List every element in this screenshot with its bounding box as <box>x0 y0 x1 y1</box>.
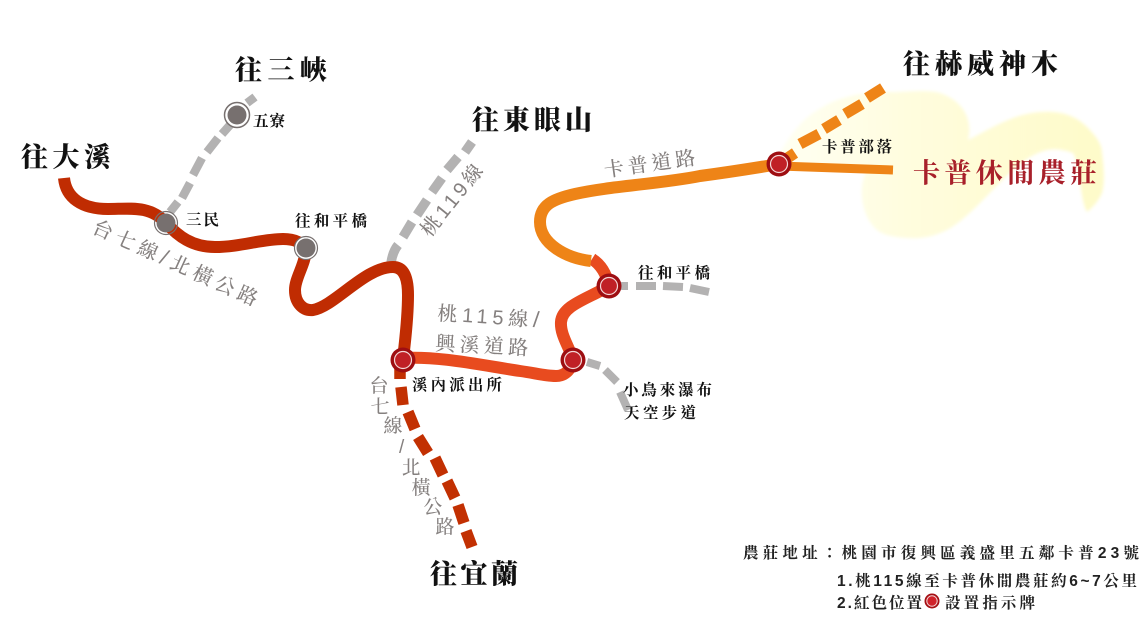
note 1: 1.桃115線至卡普休閒農莊約6~7公里 <box>837 571 1137 590</box>
road label: Xingxi road: 興溪道路 <box>435 332 529 360</box>
grey road to Xiaowulai waterfall <box>587 362 628 410</box>
road: Highway 7 dark red <box>64 178 408 360</box>
road: Highway 7 dashed to Yilan <box>400 368 472 547</box>
heading: to Yilan: 往宜蘭 <box>430 558 518 590</box>
note 2 end: 設置指示牌 <box>945 593 1035 612</box>
grey road to Dongyanshan <box>391 142 472 263</box>
place label: to Heping bridge west: 往和平橋 <box>295 211 367 230</box>
place label: Sanmin: 三民 <box>186 211 219 229</box>
grey marker: Wuliao <box>224 102 250 128</box>
grey marker: Sanmin <box>154 212 178 234</box>
heading: Kapu Leisure Farm: 卡普休閒農莊 <box>913 158 1097 188</box>
address block <box>743 543 1139 612</box>
road: Tao 115 <box>403 259 609 376</box>
place label: Wuliao: 五寮 <box>253 111 285 130</box>
road label: Tao 119: 桃119線 <box>416 160 488 241</box>
grey marker: to Heping bridge <box>294 236 318 260</box>
heading: to Sanxia: 往三峽 <box>235 54 329 86</box>
road label: Tao 115: 桃115線/ <box>437 300 541 332</box>
road: Kapu road orange <box>540 164 779 261</box>
road: branch to farm <box>779 166 893 170</box>
farm highlight: pale yellow brush shape <box>780 91 1104 238</box>
place label: Kapu village: 卡普部落 <box>822 137 892 156</box>
heading: to Hewei sacred tree: 往赫威神木 <box>903 48 1058 80</box>
road label: Highway 7 upper: 台七線/北橫公路 <box>89 214 262 311</box>
place label: skywalk: 天空步道 <box>624 403 696 422</box>
road: dashed to Hewei sacred tree <box>780 88 883 163</box>
place label: police station: 溪內派出所 <box>412 375 502 394</box>
grey road to Sanxia <box>170 97 255 212</box>
heading: to Daxi: 往大溪 <box>21 142 112 172</box>
note 2 start: 2.紅色位置 <box>837 593 922 612</box>
red sign marker: Tao 115 junction <box>560 348 586 372</box>
address line: 農莊地址：桃園市復興區義盛里五鄰卡普23號 <box>743 543 1139 562</box>
road label: Kapu road: 卡普道路 <box>602 146 697 182</box>
heading: to Dongyanshan: 往東眼山 <box>472 104 592 136</box>
red sign marker: police station <box>390 348 416 372</box>
road label: Highway 7 lower: 台七線/北橫公路 <box>370 375 455 538</box>
icon: red marker legend <box>924 594 940 608</box>
grey road to Heping bridge <box>620 286 709 292</box>
red sign marker: Kapu village <box>766 152 792 176</box>
place label: to Heping bridge east: 往和平橋 <box>638 263 710 282</box>
place label: Xiaowulai waterfall: 小鳥來瀑布 <box>623 380 712 399</box>
red sign marker: Heping junction <box>596 274 622 298</box>
